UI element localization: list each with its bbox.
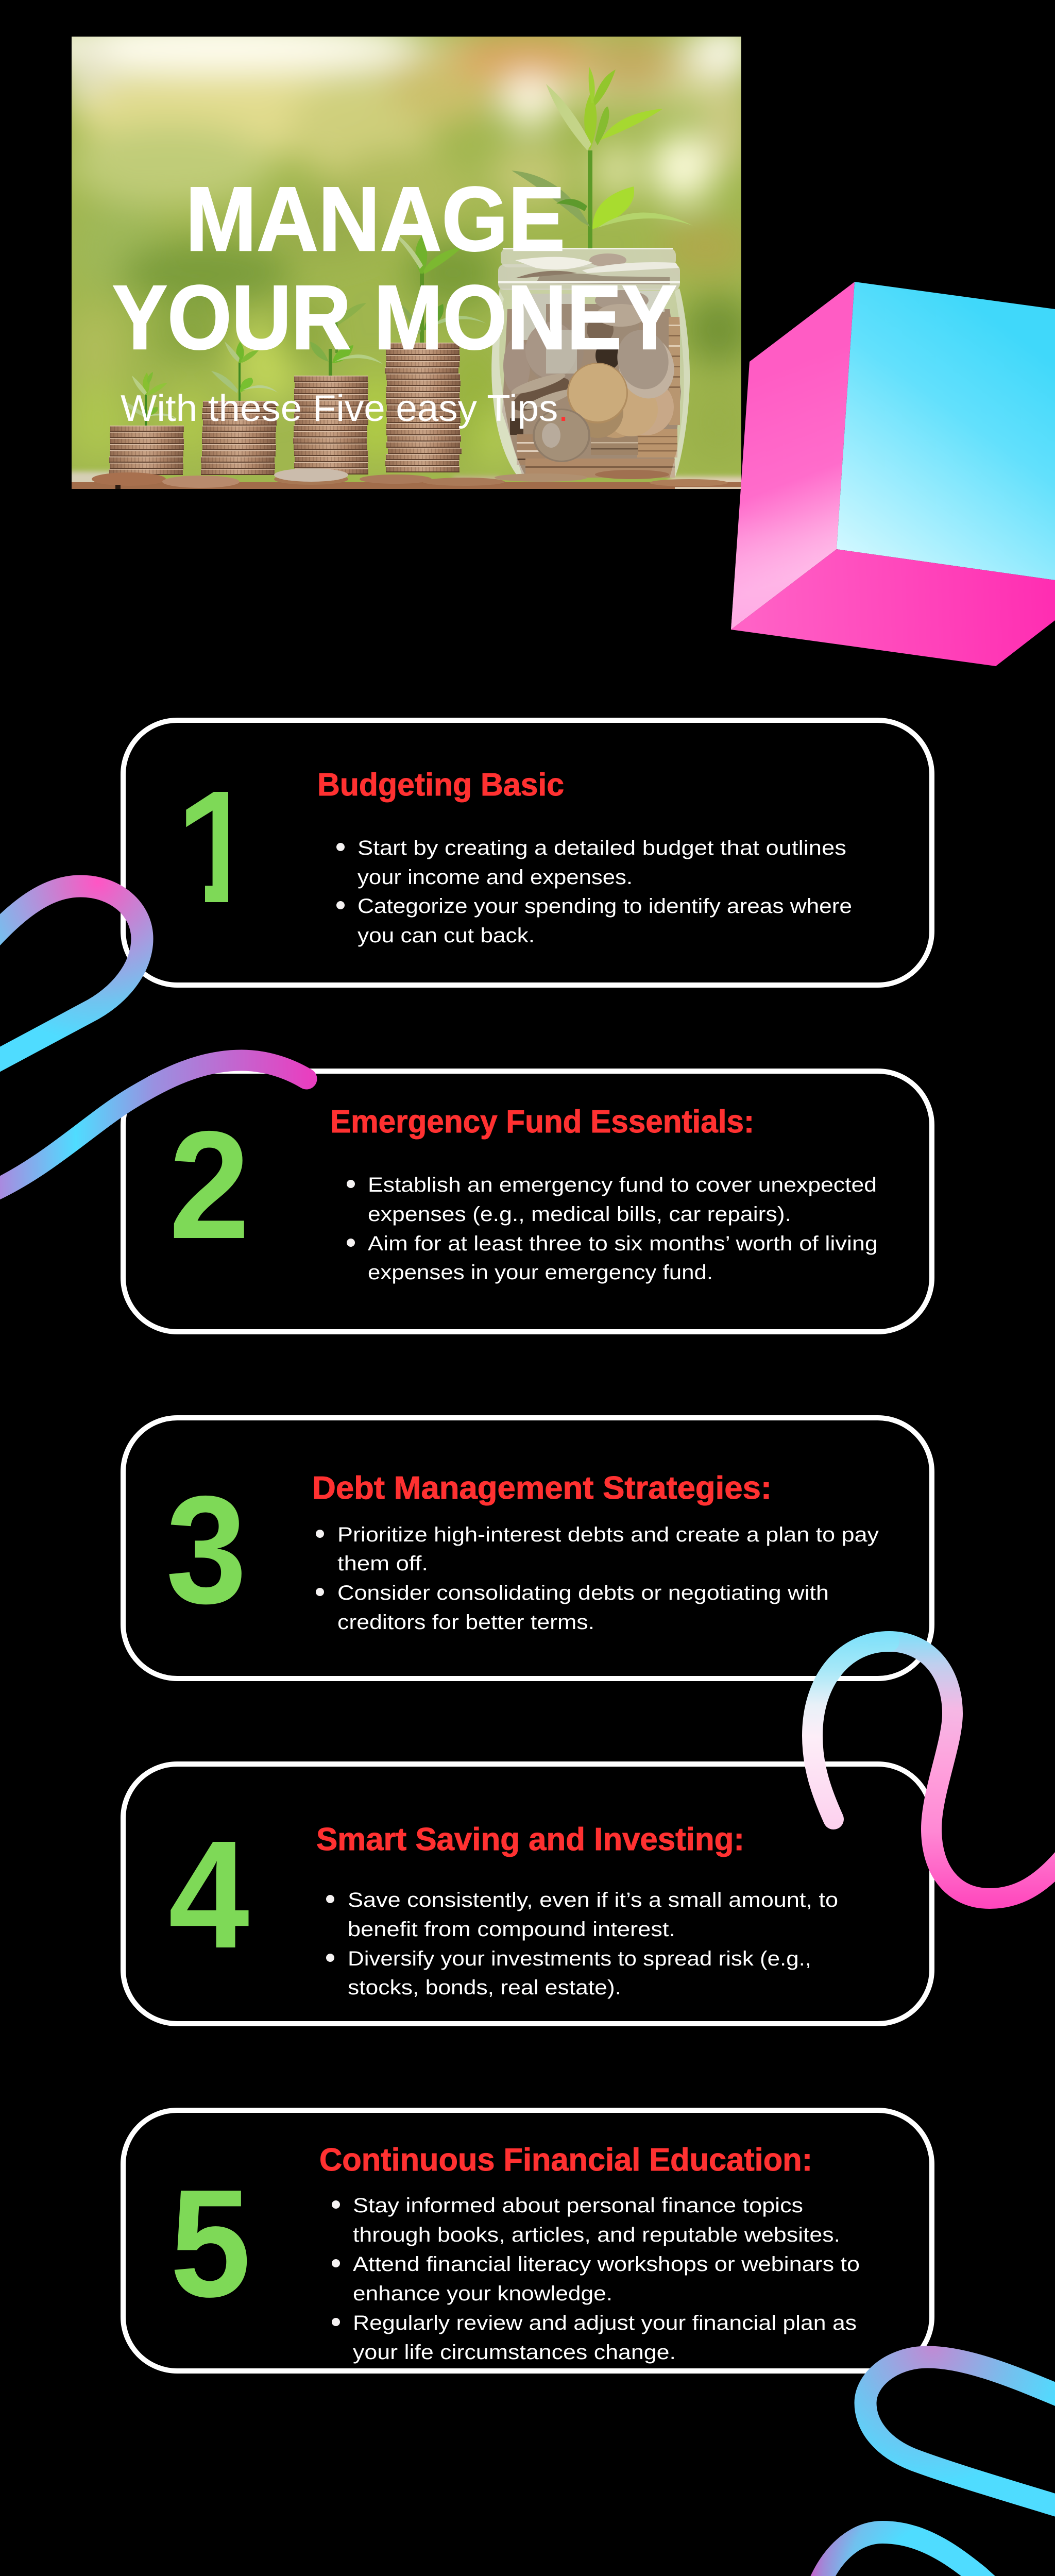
bullet list 1: you can cut back. (358, 924, 535, 947)
seedling: back plant (333, 284, 366, 353)
heading 1: Budgeting Basic (317, 767, 564, 803)
bullet list 2: Establish an emergency fund to cover unexpected (368, 1174, 877, 1196)
3D gradient cube (731, 282, 1055, 666)
bullet list 5: Stay informed about personal finance topics (353, 2194, 803, 2217)
coin stack 2 (201, 401, 277, 475)
seedling on stack 4 (399, 235, 486, 343)
heading 5: Continuous Financial Education: (319, 2142, 812, 2178)
bullet list 3 (316, 1523, 879, 1634)
bullet list 5: through books, articles, and reputable websites. (353, 2224, 840, 2246)
hero photo: coins and seedlings (72, 37, 741, 489)
subtitle: With these Five easy Tips . (121, 388, 569, 429)
heading 4: Smart Saving and Investing: (316, 1822, 744, 1857)
bullet list 5: enhance your knowledge. (353, 2282, 612, 2305)
panel: tip 2 emergency fund (123, 1071, 932, 1332)
title: MANAGE YOUR MONEY (112, 168, 677, 368)
bullet list 3: them off. (337, 1552, 428, 1575)
bullet list 4: stocks, bonds, real estate). (348, 1976, 621, 1999)
bullet list 5 (332, 2194, 860, 2364)
number 3: 3 (166, 1464, 247, 1636)
bullet list 5: your life circumstances change. (353, 2341, 676, 2364)
number 5: 5 (170, 2158, 251, 2329)
bullet list 5: Regularly review and adjust your financial plan as (353, 2312, 857, 2334)
heading 3: Debt Management Strategies: (312, 1470, 772, 1506)
bullet list 2: Aim for at least three to six months’ worth of living (368, 1232, 878, 1255)
coin stack 4 (385, 343, 462, 472)
ribbon: left wave (0, 1060, 307, 1193)
bullet list 3: creditors for better terms. (337, 1611, 594, 1634)
bullet list 2: expenses in your emergency fund. (368, 1261, 713, 1284)
coin stack 3 (293, 376, 369, 474)
pale table surface (72, 468, 741, 482)
glass jar filled with coins (491, 248, 690, 478)
bullet list 4: Save consistently, even if it’s a small amount, to (348, 1889, 838, 1911)
ribbon: right S-curve (812, 1641, 1055, 1899)
bullet list 1: your income and expenses. (358, 866, 633, 889)
number 2: 2 (169, 1099, 250, 1271)
coin stack 1 (109, 426, 184, 475)
bullet list 1: Start by creating a detailed budget that outlines (358, 837, 846, 859)
bullet list 4: benefit from compound interest. (348, 1918, 675, 1941)
heading 2: Emergency Fund Essentials: (330, 1104, 754, 1140)
number 1: 1 (175, 757, 264, 936)
bullet list 4 (326, 1889, 838, 1999)
ribbon: top-left loop (0, 886, 142, 1067)
title: MANAGE YOUR MONEY: MANAGE (185, 168, 565, 270)
bullet list 2: expenses (e.g., medical bills, car repairs). (368, 1203, 791, 1226)
seedling on stack 3 (310, 342, 383, 377)
bullet list 3: Prioritize high-interest debts and create a plan to pay (337, 1523, 879, 1546)
coins scattered on the table (72, 468, 741, 489)
jar glass highlights (491, 289, 690, 478)
bullet list 5: Attend financial literacy workshops or webinars to (353, 2253, 860, 2276)
panel: tip 3 debt management (123, 1418, 932, 1679)
bullet list 1: Categorize your spending to identify areas where (358, 895, 852, 918)
ribbon: bottom-right arc (798, 2521, 1055, 2576)
bullet list 3: Consider consolidating debts or negotiating with (337, 1582, 829, 1604)
title: MANAGE YOUR MONEY: YOUR MONEY (112, 266, 677, 368)
seedling on stack 2 (211, 342, 278, 401)
bullet list 1 (336, 837, 852, 947)
number 4: 4 (168, 1809, 250, 1980)
panel: tip 1 budgeting basic (123, 720, 932, 985)
panel: tip 4 smart saving (123, 1764, 932, 2024)
seedling on stack 1 (122, 372, 177, 426)
ribbon: bottom-right hairpin (865, 2357, 1055, 2510)
bullet list 2 (347, 1174, 878, 1284)
bullet list 4: Diversify your investments to spread risk (e.g., (348, 1947, 811, 1970)
panel: tip 5 continuous education (123, 2110, 932, 2371)
tall seedling growing from the jar (512, 67, 693, 248)
jar neck and rim (498, 248, 680, 290)
